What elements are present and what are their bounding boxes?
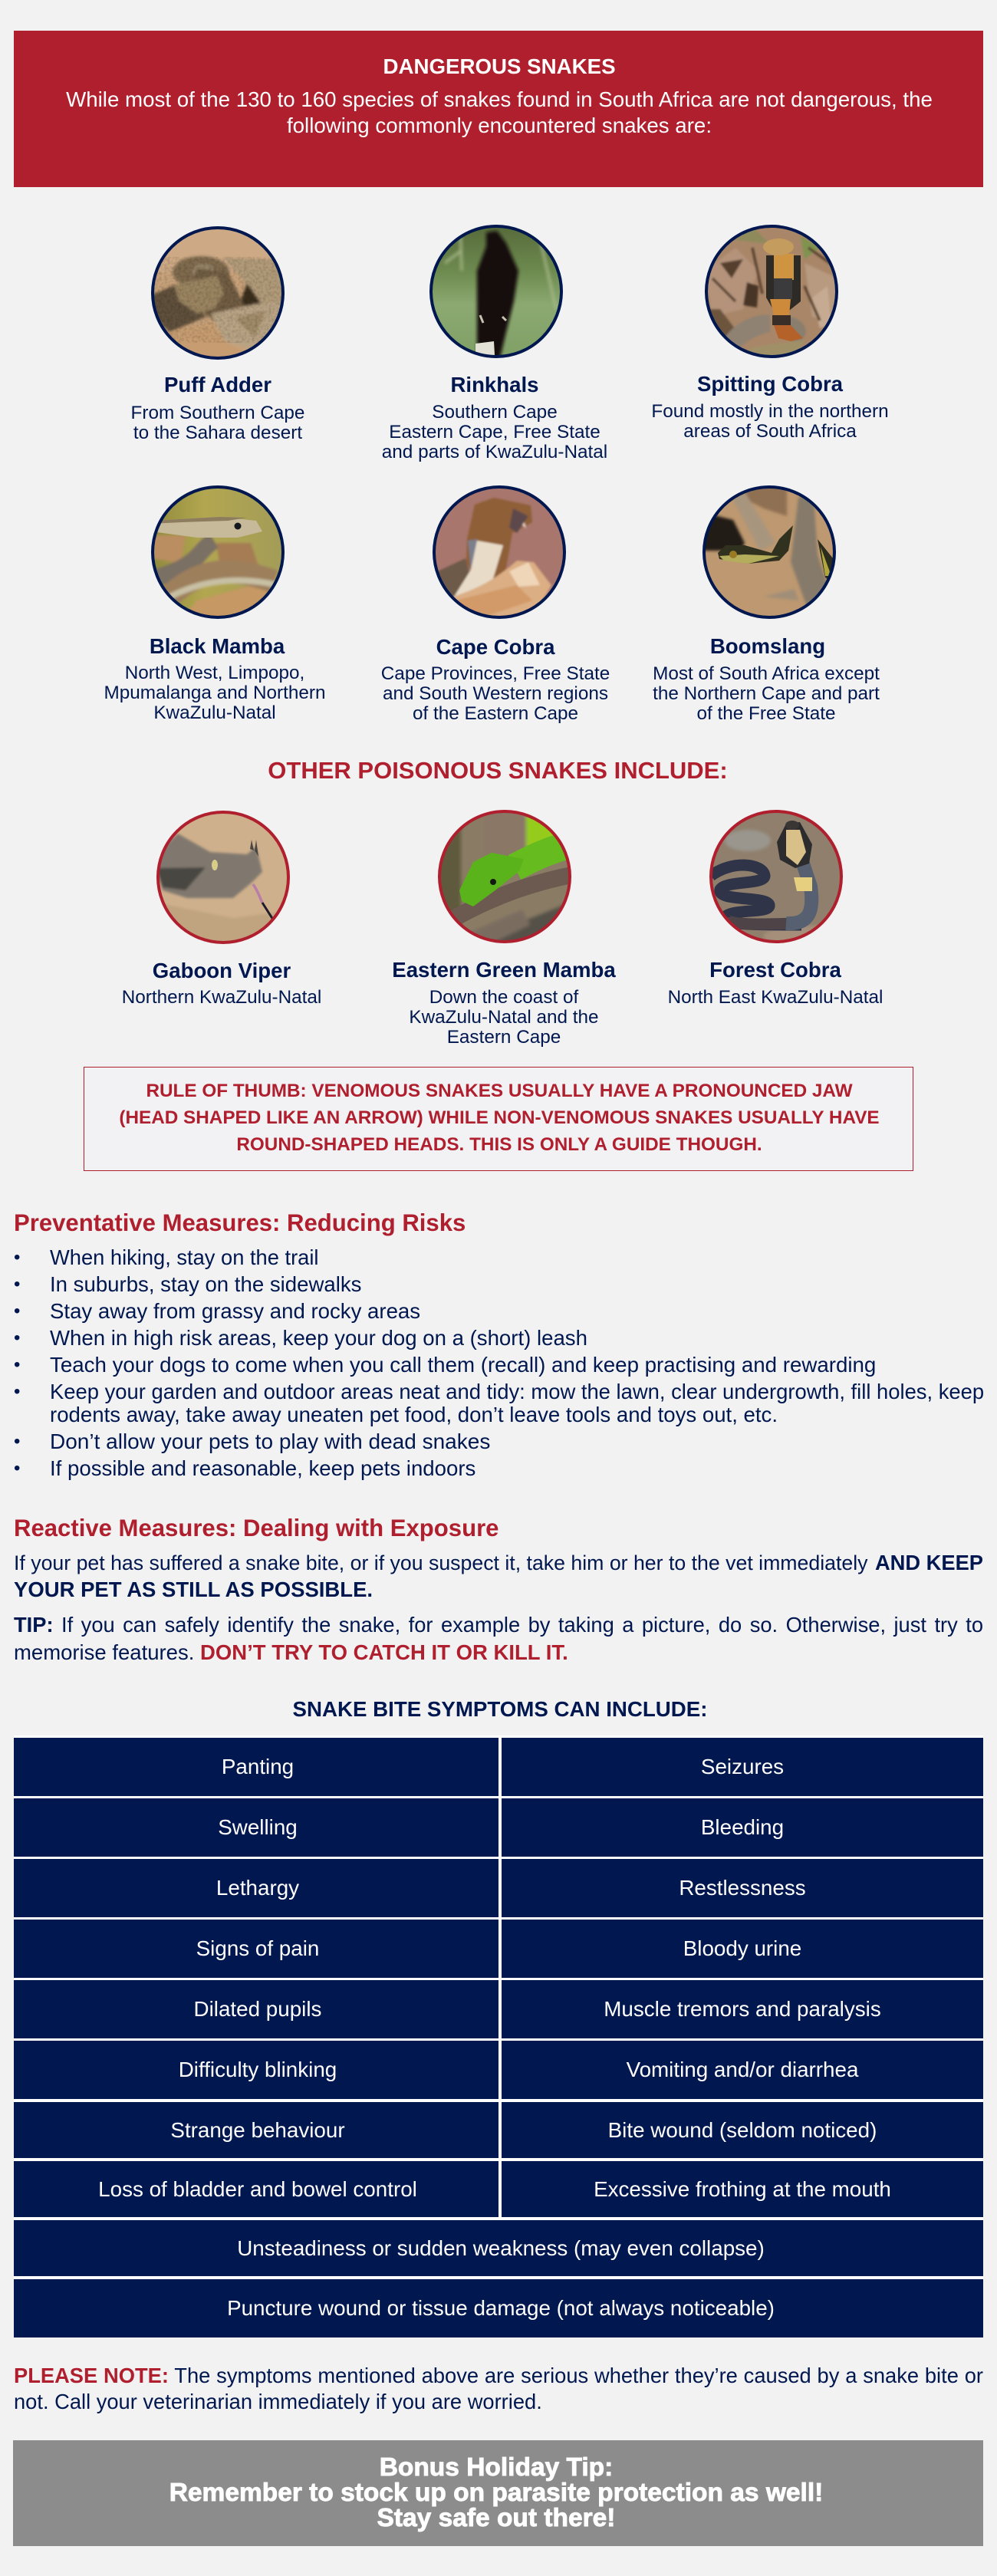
banner intro text: following commonly encountered snakes are: <box>287 114 712 137</box>
range <box>131 402 304 443</box>
snake card: Forest Cobra <box>668 810 883 1008</box>
symptoms table: Difficulty blinking <box>179 2058 337 2081</box>
list: preventative measures: • <box>14 1381 20 1402</box>
list: preventative measures: When in high risk areas, keep your dog on a (short) leash <box>50 1326 587 1350</box>
name: Eastern Green Mamba <box>392 958 616 982</box>
callout: bonus holiday tip <box>13 2440 983 2546</box>
range: Most of South Africa except <box>653 663 880 684</box>
callout: rule of thumb: RULE OF THUMB: VENOMOUS SNAKES USUALLY HAVE A PRONOUNCED JAW <box>146 1081 853 1101</box>
callout: rule of thumb <box>84 1067 913 1171</box>
range: Eastern Cape, Free State <box>389 422 601 442</box>
symptoms table: Restlessness <box>679 1876 806 1900</box>
symptoms table: Panting <box>222 1755 294 1778</box>
range: Cape Provinces, Free State <box>381 663 610 684</box>
range: KwaZulu-Natal and the <box>409 1007 599 1028</box>
heading: snake bite symptoms: SNAKE BITE SYMPTOMS CAN INCLUDE: <box>293 1697 707 1721</box>
range: Down the coast of <box>429 987 578 1008</box>
name: Black Mamba <box>150 633 285 658</box>
list: preventative measures: • <box>14 1431 20 1452</box>
list: preventative measures: Don’t allow your pets to play with dead snakes <box>50 1429 490 1453</box>
list: preventative measures: Stay away from grassy and rocky areas <box>50 1299 420 1323</box>
symptoms table: Excessive frothing at the mouth <box>594 2177 891 2201</box>
range <box>653 663 880 724</box>
list: preventative measures: When hiking, stay on the trail <box>50 1245 319 1268</box>
icon: eastern green mamba photo <box>438 810 571 943</box>
icon: black mamba photo <box>151 485 285 619</box>
range <box>381 663 610 724</box>
heading: reactive measures: Reactive Measures: Dealing with Exposure <box>14 1514 498 1541</box>
symptoms table <box>14 1735 983 2337</box>
list: preventative measures: • <box>14 1301 20 1321</box>
text block: reactive measures: YOUR PET AS STILL AS POSSIBLE. <box>14 1578 373 1601</box>
symptoms table: Swelling <box>218 1815 298 1839</box>
snake card: Gaboon Viper <box>122 811 321 1008</box>
range: of the Free State <box>696 703 835 724</box>
name: Rinkhals <box>450 373 538 396</box>
range <box>651 401 889 442</box>
list: preventative measures: • <box>14 1458 20 1479</box>
name: Cape Cobra <box>436 635 554 658</box>
banner intro text <box>66 87 933 137</box>
symptoms table: Bite wound (seldom noticed) <box>608 2118 877 2142</box>
header banner <box>14 31 983 187</box>
symptoms table: Lethargy <box>216 1876 299 1900</box>
range: of the Eastern Cape <box>413 703 578 724</box>
text block: reactive measures: If your pet has suffered a snake bite, or if you suspect it, take him or her to the vet immediately <box>14 1551 868 1574</box>
range: and South Western regions <box>383 683 608 704</box>
range <box>382 402 607 462</box>
name: Spitting Cobra <box>697 372 843 396</box>
callout: bonus holiday tip: Bonus Holiday Tip: <box>380 2453 613 2482</box>
section heading: other poisonous snakes: OTHER POISONOUS SNAKES INCLUDE: <box>268 757 728 784</box>
name: Puff Adder <box>164 373 271 396</box>
text block: please note <box>14 2364 983 2413</box>
range: and parts of KwaZulu-Natal <box>382 442 607 462</box>
callout: bonus holiday tip: Stay safe out there! <box>377 2503 615 2532</box>
icon: puff adder photo <box>151 226 285 360</box>
text block: reactive measures: memorise features. DON’T TRY TO CATCH IT OR KILL IT. <box>14 1640 568 1664</box>
range: Northern KwaZulu-Natal <box>122 987 321 1008</box>
symptoms table: Bleeding <box>701 1815 784 1839</box>
list: preventative measures: • <box>14 1274 20 1295</box>
range <box>104 663 326 723</box>
name: Boomslang <box>710 634 825 658</box>
callout: rule of thumb: ROUND-SHAPED HEADS. THIS IS ONLY A GUIDE THOUGH. <box>236 1134 762 1155</box>
range: Southern Cape <box>432 402 558 423</box>
range: the Northern Cape and part <box>653 683 880 704</box>
range: to the Sahara desert <box>133 422 302 443</box>
text block: reactive measures: AND KEEP <box>875 1551 983 1574</box>
list: preventative measures <box>14 1245 984 1480</box>
symptoms table: Dilated pupils <box>194 1997 321 2021</box>
heading: preventative measures: Preventative Measures: Reducing Risks <box>14 1209 466 1236</box>
text block: reactive measures: TIP: If you can safely identify the snake, for example by taking a picture, do so. Otherwise, just try to <box>14 1613 983 1637</box>
list: preventative measures: • <box>14 1327 20 1348</box>
callout: bonus holiday tip: Remember to stock up on parasite protection as well! <box>169 2479 823 2506</box>
callout: rule of thumb: (HEAD SHAPED LIKE AN ARROW) WHILE NON-VENOMOUS SNAKES USUALLY HAVE <box>119 1107 880 1128</box>
symptoms table: Seizures <box>701 1755 784 1778</box>
symptoms table: Bloody urine <box>683 1936 801 1960</box>
name: Forest Cobra <box>709 958 841 982</box>
snake card: Puff Adder <box>131 226 304 443</box>
symptoms table: Muscle tremors and paralysis <box>604 1997 881 2021</box>
symptoms table: Unsteadiness or sudden weakness (may even collapse) <box>237 2236 765 2260</box>
icon: gaboon viper photo <box>156 811 290 944</box>
symptoms table: Vomiting and/or diarrhea <box>627 2058 858 2081</box>
snake card: Boomslang <box>653 485 880 724</box>
range: Eastern Cape <box>447 1027 561 1048</box>
text block: please note: PLEASE NOTE: The symptoms mentioned above are serious whether they’re caused by a snake bite or <box>14 2364 983 2387</box>
text block: reactive measures <box>14 1551 983 1664</box>
name: Gaboon Viper <box>153 959 291 982</box>
symptoms table: Signs of pain <box>196 1936 319 1960</box>
list: preventative measures: • <box>14 1354 20 1375</box>
icon: boomslang photo <box>703 485 836 619</box>
list: preventative measures: rodents away, take away uneaten pet food, don’t leave tools and toys out, etc. <box>50 1403 778 1426</box>
icon: cape cobra photo <box>433 485 566 619</box>
snake card: Cape Cobra <box>381 485 610 724</box>
range: KwaZulu-Natal <box>153 702 276 723</box>
list: preventative measures: In suburbs, stay on the sidewalks <box>50 1272 361 1296</box>
snake card: Black Mamba <box>104 485 326 723</box>
range: Found mostly in the northern <box>651 401 889 422</box>
symptoms table: Strange behaviour <box>170 2118 345 2142</box>
symptoms table: Loss of bladder and bowel control <box>98 2177 417 2201</box>
range: areas of South Africa <box>683 421 857 442</box>
snake card: Rinkhals <box>382 225 607 462</box>
range: North West, Limpopo, <box>125 663 304 683</box>
icon: rinkhals photo <box>429 225 563 358</box>
range: Mpumalanga and Northern <box>104 683 326 703</box>
symptoms table: Puncture wound or tissue damage (not always noticeable) <box>227 2296 775 2320</box>
list: preventative measures: Keep your garden and outdoor areas neat and tidy: mow the lawn, clear undergrowth, fill holes, keep <box>50 1380 984 1403</box>
list: preventative measures: If possible and reasonable, keep pets indoors <box>50 1456 475 1480</box>
banner intro text: While most of the 130 to 160 species of snakes found in South Africa are not dangerous, the <box>66 87 933 111</box>
icon: spitting cobra photo <box>705 225 838 358</box>
icon: forest cobra photo <box>709 810 843 943</box>
range <box>409 987 599 1048</box>
snake card: Spitting Cobra <box>651 225 889 442</box>
range: North East KwaZulu-Natal <box>668 987 883 1008</box>
banner title: DANGEROUS SNAKES <box>383 54 616 78</box>
list: preventative measures: Teach your dogs to come when you call them (recall) and keep practising and rewarding <box>50 1353 876 1377</box>
range: From Southern Cape <box>131 402 304 423</box>
text block: please note: not. Call your veterinarian immediately if you are worried. <box>14 2390 542 2413</box>
snake card: Eastern Green Mamba <box>392 810 616 1048</box>
list: preventative measures: • <box>14 1247 20 1267</box>
